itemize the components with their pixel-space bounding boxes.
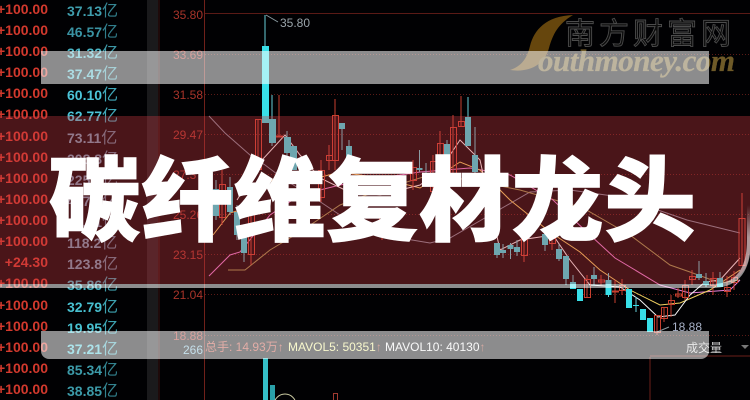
left turnover amount column: 37.21亿 <box>67 335 118 359</box>
left turnover amount column: 123.8亿 <box>67 250 118 274</box>
left turnover amount column: 447.8亿 <box>67 187 118 211</box>
left turnover amount column: 47.21亿 <box>67 208 118 232</box>
price axis labels: 25.26 <box>173 208 203 222</box>
left percent change column <box>0 1 48 397</box>
volume bars <box>263 356 750 400</box>
watermark swoosh <box>510 15 573 71</box>
price axis labels: 35.80 <box>173 8 203 22</box>
left turnover amount column: 225.5亿 <box>67 166 118 190</box>
volume legend: 成交量 <box>686 340 722 355</box>
left turnover amount column: 35.86亿 <box>67 271 118 295</box>
left turnover amount column: 32.79亿 <box>67 293 118 317</box>
high and low price markers <box>266 15 702 334</box>
left turnover amount column: 31.32亿 <box>67 39 118 63</box>
price axis labels: 23.15 <box>173 248 203 262</box>
price axis labels: 266 <box>183 343 203 357</box>
red candle bodies <box>220 116 745 332</box>
left turnover amount column: 73.11亿 <box>67 124 117 148</box>
translucent gray band top <box>41 51 709 84</box>
left turnover amount column: 85.34亿 <box>67 356 118 380</box>
teal candle bodies <box>213 46 723 332</box>
watermark chinese name: 南方财富网 <box>565 9 735 53</box>
left turnover amount column: 62.77亿 <box>67 102 118 126</box>
volume legend <box>205 340 749 355</box>
price axis labels: 33.69 <box>173 48 203 62</box>
left turnover amount column <box>67 0 118 400</box>
price axis labels: 27.37 <box>173 168 203 182</box>
moving average lines <box>209 116 740 317</box>
translucent gray band bottom <box>41 331 709 359</box>
left turnover amount column: 60.10亿 <box>67 81 118 105</box>
left percent change column: +24.30 <box>5 254 48 270</box>
high and low price markers: 18.88 <box>672 320 702 334</box>
red candle wicks <box>222 95 742 335</box>
price axis labels: 18.88 <box>173 329 203 343</box>
left turnover amount column: 208.8亿 <box>67 145 118 169</box>
watermark url: outhmoney.com <box>538 43 735 78</box>
price axis labels: 21.04 <box>173 288 203 302</box>
left turnover amount column: 118.2亿 <box>67 229 117 253</box>
title: 碳纤维复材龙头 <box>49 128 697 260</box>
price axis labels: 29.47 <box>173 128 203 142</box>
teal candle wicks <box>216 15 720 312</box>
left turnover amount column: 19.95亿 <box>67 314 118 338</box>
left turnover amount column: 37.47亿 <box>67 60 118 84</box>
volume legend: 总手: 14.93万↑ <box>205 340 284 354</box>
volume legend: MAVOL5: 50351↑ <box>288 340 382 354</box>
volume legend: MAVOL10: 40130↑ <box>385 340 486 354</box>
watermark: southmoney logo <box>510 9 735 78</box>
high and low price markers: 35.80 <box>280 16 310 30</box>
price axis labels <box>173 8 203 357</box>
left turnover amount column: 46.57亿 <box>67 18 118 42</box>
price axis labels: 31.58 <box>173 88 203 102</box>
